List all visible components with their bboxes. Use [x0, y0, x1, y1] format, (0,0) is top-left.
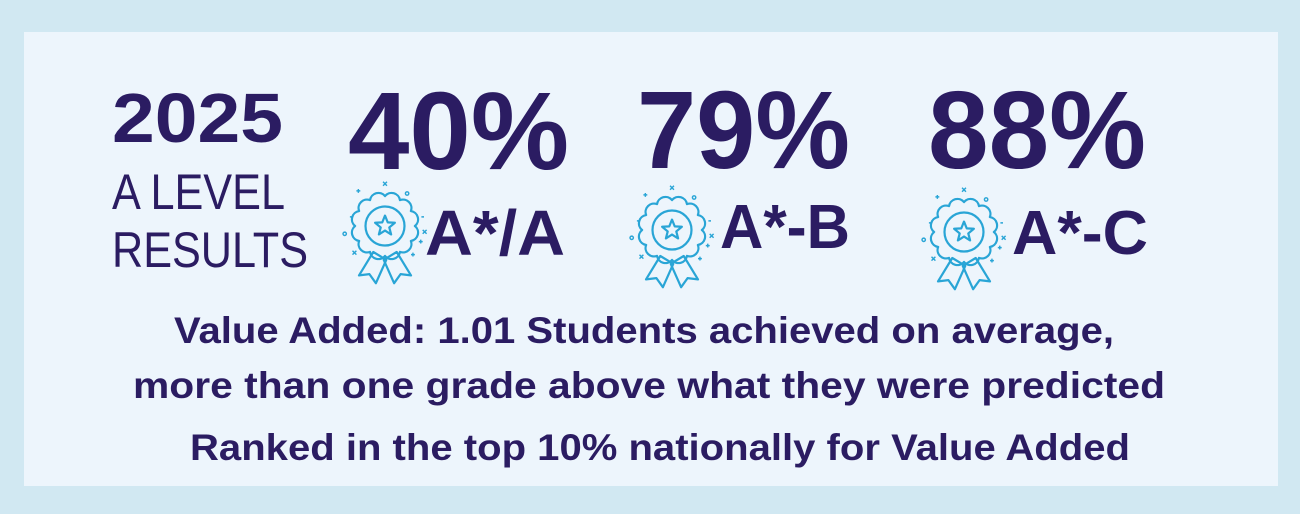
stat: 79% A*-B: [630, 69, 850, 287]
text block: value added: more than one grade above what they were predicted: [133, 365, 1165, 406]
icon: award rosette: [630, 186, 714, 287]
heading: 2025 A level results: 2025: [112, 79, 283, 157]
stat: 79% A*-B: 79%: [637, 69, 850, 192]
heading: 2025 A level results: [112, 79, 308, 278]
stat: 40% A*/A: [343, 70, 569, 283]
stat: 88% A*-C: [922, 69, 1148, 289]
stat: 40% A*/A: 40%: [348, 70, 569, 193]
stat: 79% A*-B: A*-B: [720, 193, 850, 262]
stat: 40% A*/A: A*/A: [425, 197, 565, 269]
text block: value added: Value Added: 1.01 Students achieved on average,: [174, 310, 1114, 351]
heading: 2025 A level results: RESULTS: [112, 222, 308, 278]
text block: value added: [133, 310, 1165, 406]
heading: 2025 A level results: A LEVEL: [112, 164, 285, 220]
icon: award rosette: [922, 188, 1006, 289]
stat: 88% A*-C: 88%: [928, 69, 1146, 192]
icon: award rosette: [343, 182, 427, 283]
text block: ranking: Ranked in the top 10% nationally for Value Added: [190, 427, 1130, 468]
stat: 88% A*-C: A*-C: [1012, 199, 1148, 268]
